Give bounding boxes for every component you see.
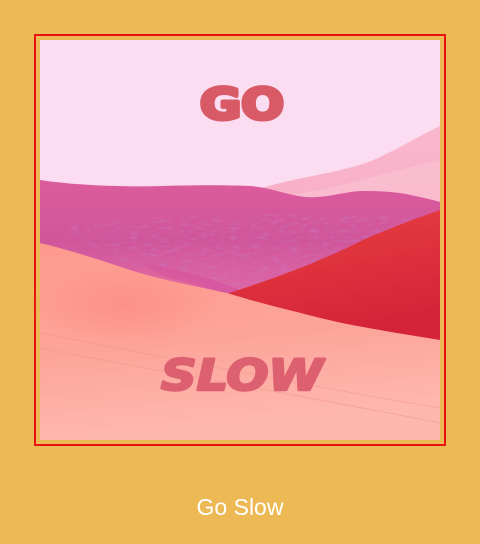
peach foreground dune — [25, 243, 440, 440]
heading: SLOW: SLOW — [161, 351, 326, 401]
caption: Go Slow — [197, 494, 283, 520]
pale pink far dune — [262, 126, 440, 210]
sky — [40, 40, 440, 440]
red dune — [226, 210, 440, 345]
magenta desert — [40, 180, 440, 300]
red frame — [35, 35, 445, 445]
heading: GO: GO — [200, 80, 284, 130]
